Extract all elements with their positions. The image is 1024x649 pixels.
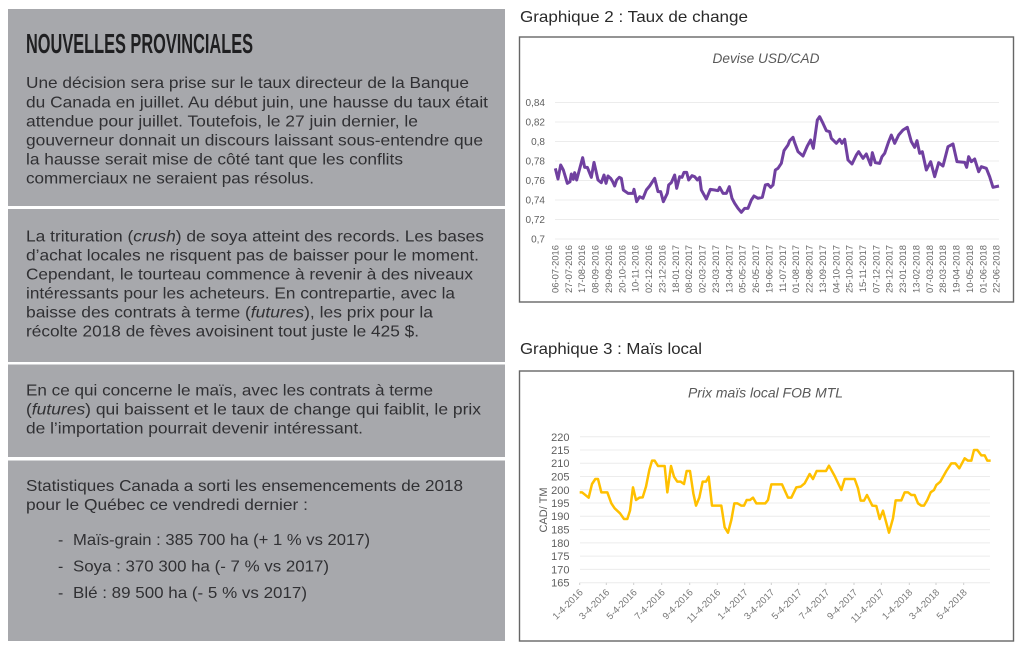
text block: interest rate: gouverneur donnait un discours laissant sous-entendre que (26, 132, 483, 150)
x axis date labels: 10-05-2018 (964, 245, 975, 293)
x axis date labels: 29-12-2017 (884, 245, 895, 293)
text block: corn: En ce qui concerne le maïs, avec les contrats à terme (26, 382, 433, 399)
panel: corn (8, 364, 505, 457)
x axis date labels: 25-10-2017 (844, 245, 855, 293)
y axis labels: 210 (551, 458, 570, 470)
text block: soybean: récolte 2018 de fèves avoisinent tout juste le 425 $. (26, 324, 419, 340)
text block: corn: de l’importation pourrait devenir intéressant. (26, 420, 363, 437)
list: seeded areas: - (58, 585, 63, 602)
text block: interest rate: Une décision sera prise sur le taux directeur de la Banque (26, 75, 469, 92)
text block: soybean (26, 228, 484, 340)
y axis labels: 215 (551, 445, 570, 457)
x axis date labels: 10-11-2016 (630, 245, 641, 292)
heading: NOUVELLES PROVINCIALES (26, 28, 253, 59)
x axis date labels: 22-06-2018 (991, 245, 1002, 293)
y axis labels: 200 (551, 485, 570, 497)
text block: soybean: La trituration ( crush) de soya atteint des records. Les bases (26, 228, 484, 246)
y axis labels: 0,8 (531, 137, 545, 148)
x axis date labels: 01-08-2017 (790, 245, 801, 293)
y axis labels: 0,76 (526, 176, 545, 187)
x axis date labels: 13-04-2017 (723, 245, 734, 293)
x axis date labels: 3-4-2016 (577, 587, 612, 622)
x axis date labels: 7-4-2016 (633, 587, 668, 622)
y axis labels: 190 (551, 511, 570, 523)
x axis date labels: 1-4-2016 (551, 587, 586, 622)
x axis date labels: 13-02-2018 (910, 245, 922, 293)
text block: statistics intro: Statistiques Canada a sorti les ensemencements de 2018 (26, 478, 463, 495)
text block: interest rate: commerciaux ne seraient pas résolus. (26, 170, 314, 188)
y axis labels: 180 (551, 538, 570, 550)
panel: seeding statistics (8, 460, 505, 641)
x axis date labels: 08-09-2016 (590, 245, 601, 293)
list: seeded areas: Blé : 89 500 ha (- 5 % vs 2017) (73, 585, 307, 602)
y axis labels: 175 (551, 551, 570, 563)
y axis labels: 220 (551, 432, 570, 444)
x axis date labels: 5-4-2016 (605, 587, 640, 622)
y axis labels: 185 (551, 524, 570, 536)
panel: soybean crush (8, 209, 505, 362)
x axis date labels: 02-12-2016 (643, 245, 654, 293)
x axis date labels: 08-02-2017 (683, 245, 694, 293)
text block: interest rate: du Canada en juillet. Au début juin, une hausse du taux était (26, 94, 489, 112)
x axis date labels: 29-09-2016 (603, 245, 614, 293)
x axis date labels: 22-08-2017 (804, 245, 814, 293)
x axis date labels: 01-06-2018 (977, 245, 988, 293)
x axis date labels: 13-09-2017 (817, 245, 828, 293)
x axis date labels: 1-4-2017 (716, 587, 751, 622)
text block: interest rate: attendue pour juillet. Toutefois, le 27 juin dernier, le (26, 114, 418, 130)
y axis labels: 0,74 (526, 196, 545, 206)
x axis date labels: 19-06-2017 (763, 245, 774, 293)
x axis date labels: 26-05-2017 (750, 245, 761, 293)
x axis date labels: 20-10-2016 (616, 245, 627, 293)
chart title: Devise USD/CAD (712, 50, 820, 66)
x axis date labels: 23-03-2017 (710, 245, 721, 293)
x axis date labels: 11-07-2017 (777, 245, 788, 292)
purple line: USD/CAD (555, 117, 999, 212)
y axis labels: 0,82 (526, 118, 545, 128)
x axis date labels: 07-12-2017 (870, 245, 881, 293)
heading: chart 2: Graphique 2 : Taux de change (520, 9, 748, 26)
x axis date labels: 18-01-2017 (670, 245, 681, 293)
text block: interest rate: la hausse serait mise de côté tant que les conflits (26, 152, 403, 168)
x axis date labels: 1-4-2018 (880, 587, 915, 622)
x axis date labels: 05-05-2017 (737, 245, 748, 293)
x axis date labels: 7-4-2017 (797, 587, 832, 622)
y axis title: CAD/ TM (538, 487, 550, 533)
text block: corn (26, 382, 481, 437)
y axis labels: 205 (551, 472, 570, 484)
list: seeded areas: Soya : 370 300 ha (- 7 % vs 2017) (73, 559, 329, 576)
x axis date labels: 5-4-2017 (770, 587, 805, 622)
y axis labels: 0,72 (526, 215, 545, 226)
x axis date labels: 9-4-2017 (825, 587, 860, 622)
panel: provincial news intro (8, 9, 505, 206)
heading: chart 3: Graphique 3 : Maïs local (520, 341, 702, 358)
x axis date labels: 11-4-2017 (849, 587, 887, 626)
x axis date labels: 5-4-2018 (935, 587, 970, 622)
yellow line: corn price (580, 450, 991, 533)
x axis date labels: 28-03-2018 (937, 245, 948, 293)
chart: local corn price (520, 371, 1014, 641)
list: seeded areas: - (58, 532, 63, 549)
x axis date labels: 23-12-2016 (656, 245, 668, 293)
y axis labels: 165 (551, 578, 570, 590)
x axis date labels: 3-4-2017 (742, 587, 777, 622)
x axis date labels: 19-04-2018 (951, 245, 962, 293)
y axis labels (526, 98, 545, 246)
text block: soybean: d’achat locales ne risquent pas de baisser pour le moment. (26, 248, 479, 264)
chart title: Prix maïs local FOB MTL (688, 385, 843, 401)
x axis date labels (550, 245, 1002, 293)
x axis date labels: 07-03-2018 (924, 245, 935, 293)
text block: statistics intro (26, 478, 463, 514)
y axis labels: 0,78 (526, 156, 545, 168)
x axis date labels: 04-10-2017 (830, 245, 841, 293)
x axis date labels: 02-03-2017 (697, 245, 708, 293)
y axis labels: 195 (551, 498, 570, 510)
x axis date labels: 15-11-2017 (857, 245, 868, 292)
list: seeded areas: Maïs-grain : 385 700 ha (+ 1 % vs 2017) (73, 532, 370, 549)
x axis date labels: 23-01-2018 (897, 245, 908, 293)
x axis date labels (551, 587, 970, 626)
x axis ticks (580, 583, 964, 585)
text block: statistics intro: pour le Québec ce vendredi dernier : (26, 497, 308, 514)
list: seeded areas: - (58, 559, 63, 576)
y axis labels: 0,7 (531, 234, 545, 246)
text block: corn: (futures ) qui baissent et le taux de change qui faiblit, le prix (26, 401, 481, 418)
text block: interest rate (26, 75, 489, 188)
y axis labels: 170 (551, 564, 570, 576)
list: seeded areas (58, 532, 370, 602)
x axis date labels: 06-07-2016 (550, 245, 560, 293)
x axis date labels: 17-08-2016 (576, 245, 587, 293)
text block: soybean: Cependant, le tourteau commence à revenir à des niveaux (26, 266, 473, 284)
x axis date labels: 11-4-2016 (685, 587, 723, 626)
y axis labels: 0,84 (526, 98, 545, 109)
x axis date labels: 9-4-2016 (661, 587, 696, 622)
x axis date labels: 3-4-2018 (907, 587, 942, 622)
text block: soybean: intéressants pour les acheteurs. En contrepartie, avec la (26, 286, 455, 302)
x axis date labels: 27-07-2016 (563, 245, 574, 293)
chart: USD/CAD exchange rate (520, 37, 1014, 302)
text block: soybean: baisse des contrats à terme ( futures ), les prix pour la (26, 304, 433, 322)
y axis labels (551, 432, 570, 590)
